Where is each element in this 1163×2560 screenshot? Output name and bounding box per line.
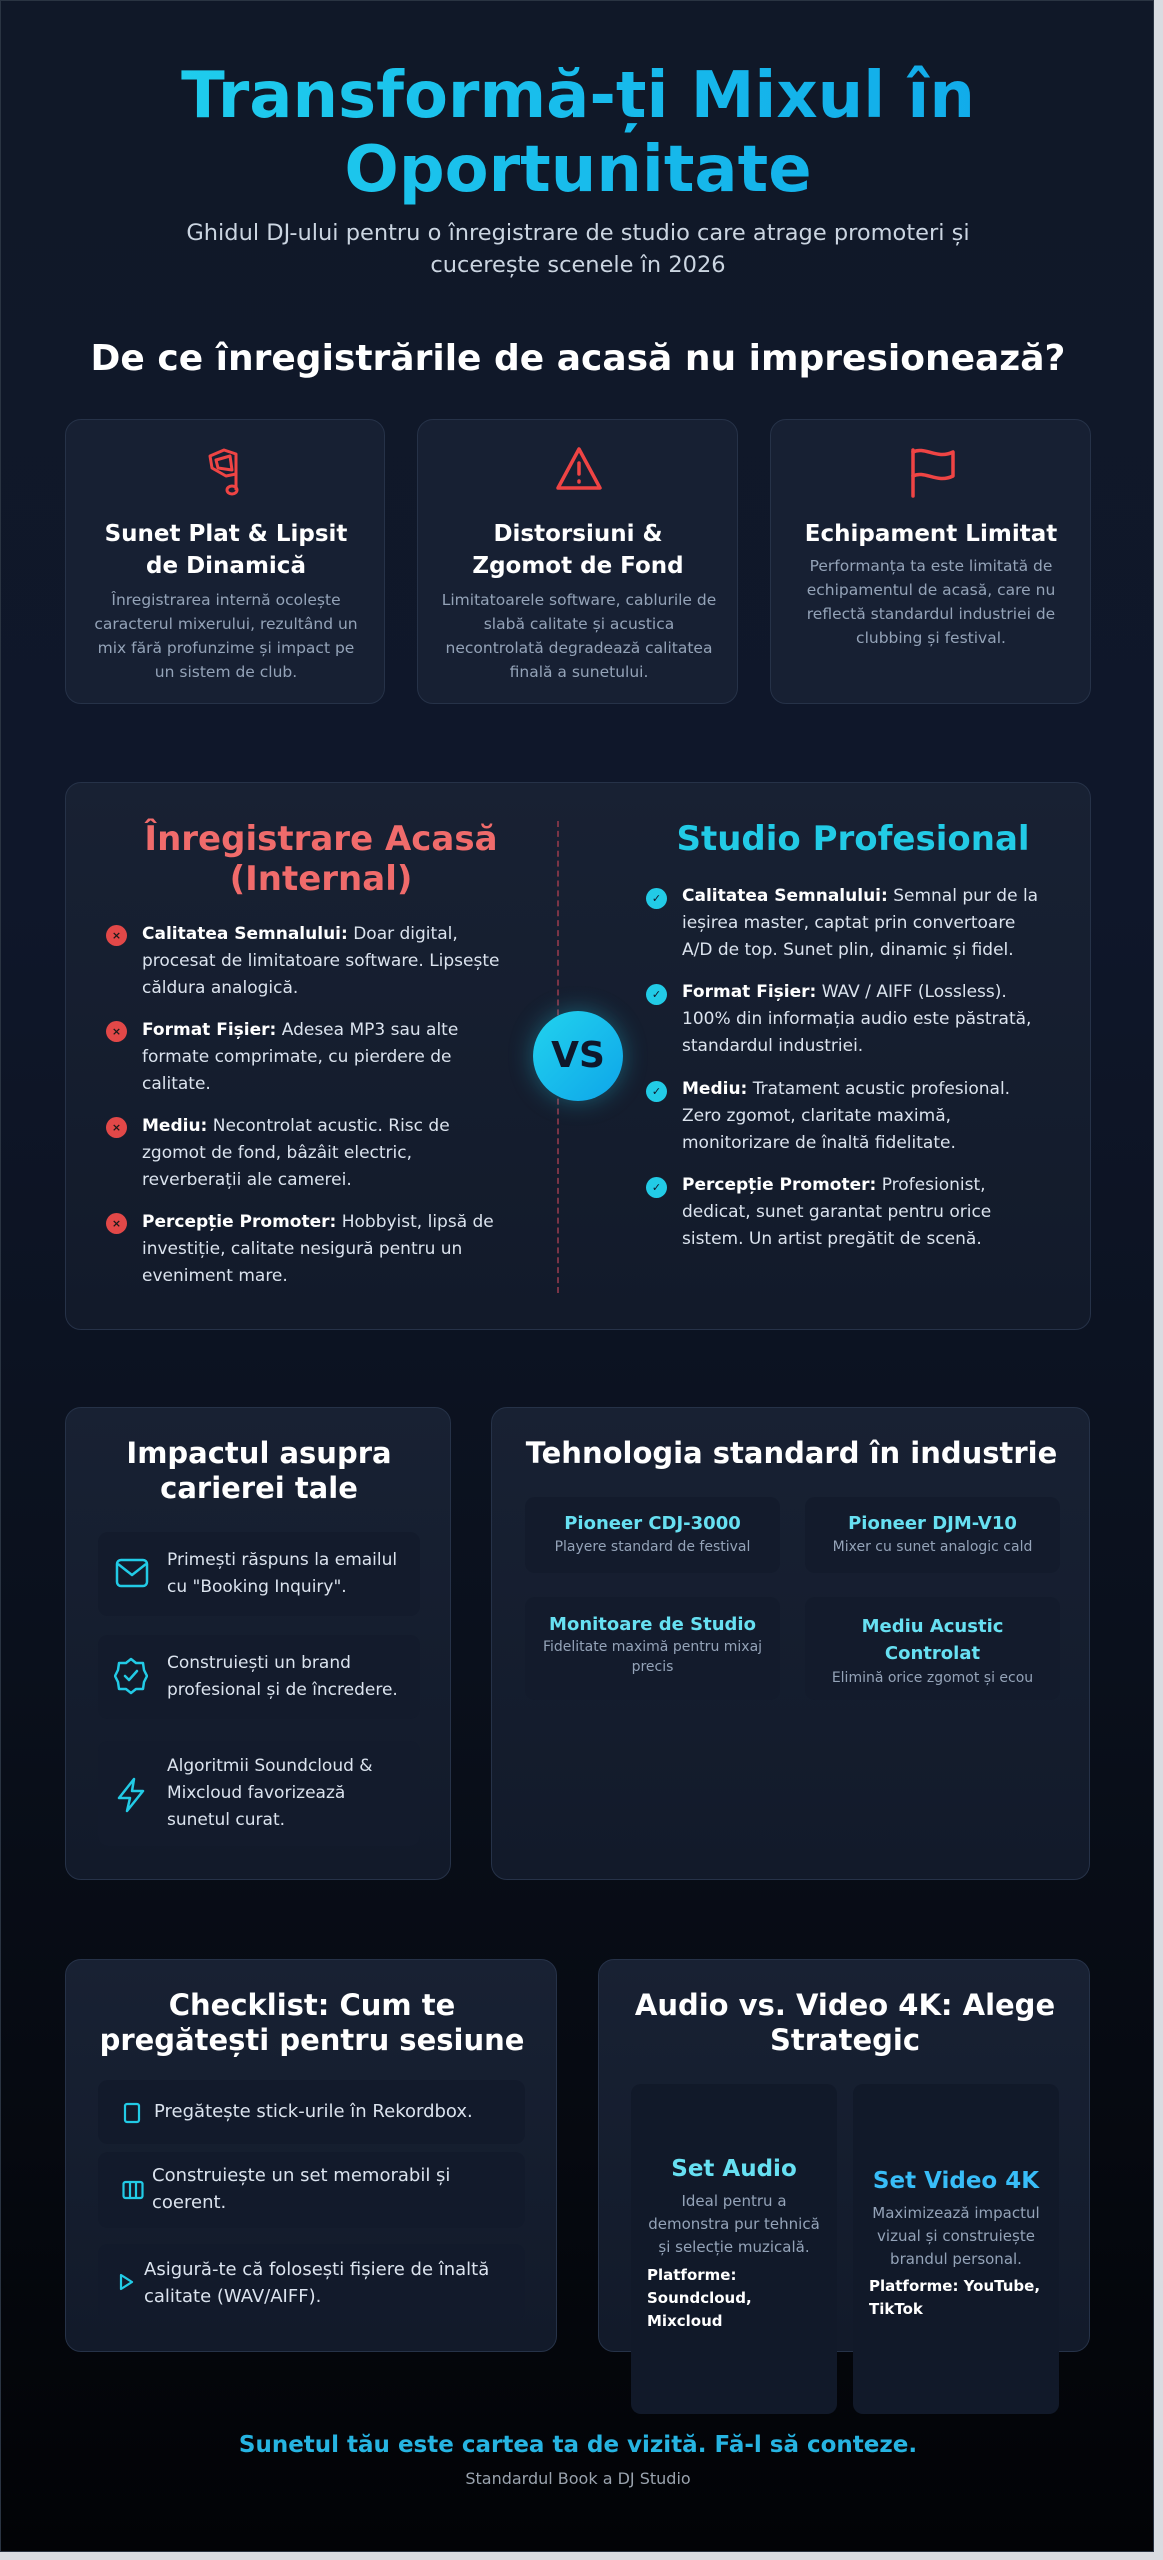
home list: ×: [112, 1025, 121, 1038]
tech: DJM: Mixer cu sunet analogic cald: [833, 1539, 1032, 1555]
option: video: Platforme: YouTube, TikTok: [869, 2277, 1040, 2318]
item: [646, 982, 1031, 1056]
studio list: ✓: [652, 1181, 661, 1194]
panel: comparison: [65, 782, 1091, 1330]
title: Oportunitate: [344, 133, 812, 207]
tech: monitors: Fidelitate maximă pentru mixaj precis: [543, 1639, 762, 1675]
card: equipment: [770, 419, 1091, 704]
option: video: [853, 2084, 1059, 2414]
studio list: ✓: [652, 1085, 661, 1098]
item: Calitatea Semnalului: Doar digital, procesat de limitatoare software. Lipsește căldura analogică.: [142, 924, 499, 998]
item: algorithms: Algoritmii Soundcloud &: [167, 1756, 373, 1776]
studio list: ✓: [652, 892, 661, 905]
subtitle: Ghidul DJ-ului pentru o înregistrare de studio care atrage promoteri și: [186, 220, 970, 246]
item: brand: Construiești un brand profesional și de încredere.: [167, 1653, 398, 1700]
item: A/D de top. Sunet plin, dinamic și fidel.: [682, 940, 1014, 960]
item: algorithms: sunetul curat.: [167, 1810, 285, 1830]
item: usb: [98, 2080, 525, 2144]
item: algorithms: [98, 1741, 420, 1846]
item: dedicat, sunet garantat pentru orice sistem. Un artist pregătit de scenă.: [682, 1202, 991, 1249]
panel: career impact: [65, 1407, 451, 1880]
tech: DJM: [805, 1497, 1060, 1573]
heading: home: (Internal): [230, 859, 412, 899]
icon: VS badge: VS: [551, 1035, 605, 1076]
option: audio: Set Audio: [671, 2156, 797, 2182]
heading: Audio vs. Video 4K: Alege Strategic: [635, 1988, 1055, 2057]
item: set: [98, 2152, 525, 2228]
item: usb: Pregătește stick-urile în Rekordbox.: [154, 2101, 473, 2122]
icon: music: [208, 448, 238, 496]
heading: pregătești pentru sesiune: [100, 2023, 524, 2057]
card title: Sunet Plat & Lipsit: [105, 521, 347, 547]
heading: problems: De ce înregistrările de acasă nu impresionează?: [91, 338, 1065, 379]
card: distortion: [417, 419, 738, 704]
tech: acoustic: Mediu Acustic: [862, 1616, 1003, 1637]
card text: Performanța ta este limitată de echipamentul de acasă, care nu reflectă standardul industriei de clubbing și festival.: [807, 557, 1055, 647]
home list: ×: [112, 1121, 121, 1134]
home list: ×: [112, 929, 121, 942]
card title: de Dinamică: [146, 553, 306, 579]
tech: acoustic: Elimină orice zgomot și ecou: [832, 1670, 1033, 1686]
heading: Checklist: Cum te: [169, 1988, 455, 2022]
item: set: Construiește un set memorabil și coerent.: [152, 2165, 450, 2213]
item: [646, 886, 1038, 960]
heading: Tehnologia standard în industrie: [526, 1436, 1057, 1470]
card title: Echipament Limitat: [805, 521, 1057, 547]
panel: checklist: [65, 1959, 557, 2352]
item: algorithms: Mixcloud favorizează: [167, 1783, 345, 1803]
item: Percepție Promoter: Profesionist,: [682, 1175, 986, 1195]
divider: [557, 821, 559, 1293]
heading: [100, 1988, 524, 2057]
item: brand: [98, 1635, 420, 1719]
icon: warning: [556, 447, 602, 490]
item: files: Asigură-te că folosești fișiere de înaltă calitate (WAV/AIFF).: [144, 2259, 489, 2307]
home list: [106, 924, 499, 1286]
panel: audio vs video: [598, 1959, 1090, 2352]
card text: Limitatoarele software, cablurile de slabă calitate și acustica necontrolată degradează calitatea finală a sunetului.: [442, 591, 716, 681]
tech: acoustic: Controlat: [885, 1643, 980, 1664]
studio list: [646, 886, 1038, 1249]
option: video: Maximizează impactul vizual și construiește brandul personal.: [872, 2204, 1040, 2268]
item: Format Fișier: WAV / AIFF (Lossless).: [682, 982, 1007, 1002]
option: audio: Ideal pentru a demonstra pur tehnică și selecție muzicală.: [648, 2192, 820, 2256]
option: audio: [631, 2084, 837, 2414]
item: Percepție Promoter: Hobbyist, lipsă de investiție, calitate nesigură pentru un eveniment mare.: [142, 1212, 494, 1286]
tech: monitors: Monitoare de Studio: [549, 1614, 756, 1635]
tech: DJM: Pioneer DJM-V10: [848, 1513, 1017, 1534]
heading: home: [144, 818, 498, 899]
heading: home: Înregistrare Acasă: [144, 819, 498, 859]
tech: CDJ: Pioneer CDJ-3000: [564, 1513, 741, 1534]
card title: [105, 521, 347, 579]
tech: acoustic: [805, 1597, 1060, 1700]
item: Zero zgomot, claritate maximă,: [682, 1106, 951, 1126]
heading: studio: Studio Profesional: [676, 819, 1030, 859]
item: Calitatea Semnalului: Semnal pur de la ieșirea master, captat prin convertoare: [682, 886, 1038, 933]
panel: industry tech: [491, 1407, 1090, 1880]
home list: ×: [112, 1217, 121, 1230]
footer credit: Standardul Book a DJ Studio: [465, 2469, 691, 2488]
item: email: [98, 1532, 420, 1616]
title: [1, 59, 1155, 207]
item: Format Fișier: Adesea MP3 sau alte formate comprimate, cu pierdere de calitate.: [142, 1020, 458, 1094]
tech: CDJ: [525, 1497, 780, 1573]
studio list: ✓: [652, 988, 661, 1001]
subtitle: cucerește scenele în 2026: [430, 252, 726, 278]
option: audio: Platforme: Soundcloud, Mixcloud: [647, 2266, 752, 2330]
title: Transformă-ți Mixul în: [181, 59, 975, 133]
heading: Impactul asupra carierei tale: [126, 1436, 392, 1505]
footer tagline: Sunetul tău este cartea ta de vizită. Fă-l să conteze.: [239, 2432, 917, 2458]
subtitle: [186, 220, 970, 278]
item: Mediu: Necontrolat acustic. Risc de zgomot de fond, bâzâit electric, reverberații ale camerei.: [142, 1116, 450, 1190]
icon: VS badge: [533, 1011, 623, 1101]
icon: flag: [911, 448, 955, 498]
item: email: Primești răspuns la emailul cu "Booking Inquiry".: [167, 1550, 397, 1597]
item: monitorizare de înaltă fidelitate.: [682, 1133, 956, 1153]
card title: [472, 521, 684, 579]
card title: Distorsiuni &: [493, 521, 663, 547]
item: Mediu: Tratament acustic profesional.: [682, 1079, 1010, 1099]
card: flat sound: [65, 419, 385, 704]
panel: problem cards: [65, 419, 1091, 704]
item: 100% din informația audio este păstrată, standardul industriei.: [682, 1009, 1031, 1056]
option: video: Set Video 4K: [873, 2168, 1039, 2194]
item: [646, 1079, 1010, 1153]
card text: Înregistrarea internă ocolește caracterul mixerului, rezultând un mix fără profunzime și impact pe un sistem de club.: [94, 591, 358, 681]
tech: CDJ: Playere standard de festival: [555, 1539, 750, 1555]
tech: monitors: [525, 1597, 780, 1700]
item: [646, 1175, 991, 1249]
card title: Zgomot de Fond: [472, 553, 684, 579]
item: files: [98, 2244, 525, 2320]
